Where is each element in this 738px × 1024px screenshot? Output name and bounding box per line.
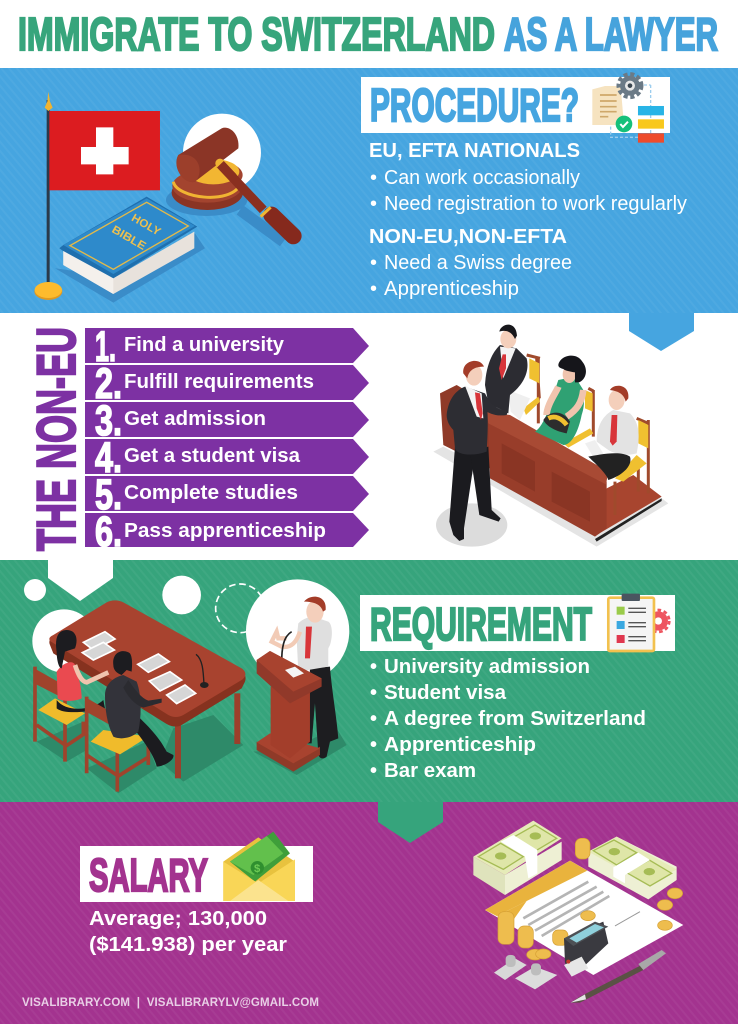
illustration: holy bible: BIBLE	[109, 224, 148, 253]
icon: envelope with money	[223, 832, 295, 901]
step 6	[85, 508, 369, 556]
list: requirements: Student visa	[384, 682, 507, 704]
arrow: blue pointer	[629, 313, 694, 351]
illustration: holy bible: HOLY	[129, 212, 163, 239]
list: requirements: A degree from Switzerland	[384, 708, 646, 730]
illustration: courtroom bench	[433, 325, 668, 547]
stamp	[564, 922, 608, 977]
step 4: Get a student visa	[124, 445, 301, 467]
list: requirements: •	[370, 656, 377, 678]
pen	[571, 950, 666, 1003]
step 4	[85, 434, 369, 482]
heading: the non-EU: THE NON-EU	[25, 327, 87, 551]
list: requirements: •	[370, 682, 377, 704]
list: requirements: Apprenticeship	[384, 734, 536, 756]
list: requirements: •	[370, 734, 377, 756]
cash stack left	[473, 821, 562, 895]
step 3: 3.	[95, 397, 122, 445]
step 5: 5.	[95, 471, 122, 519]
step 5	[85, 471, 369, 519]
step 1: Find a university	[124, 334, 285, 356]
icon: envelope with money: $	[254, 863, 261, 875]
text: non-EU, non-EFTA: Need a Swiss degree	[384, 252, 572, 274]
icon: procedure flowchart	[592, 74, 664, 143]
heading: requirement: REQUIREMENT	[370, 598, 592, 650]
text: EU, EFTA nationals	[369, 140, 687, 215]
icon: checklist with gear	[608, 594, 669, 651]
heading: procedure: PROCEDURE?	[370, 79, 579, 131]
text: EU, EFTA nationals: Need registration to work regularly	[384, 193, 687, 215]
list: requirements: •	[370, 760, 377, 782]
step 2	[85, 360, 369, 408]
title: IMMIGRATE TO SWITZERLAND	[18, 8, 495, 60]
list: requirements	[370, 656, 646, 782]
arrow: white pointer	[48, 560, 113, 601]
text: average salary: ($141.938) per year	[89, 934, 287, 956]
heading: salary: SALARY	[89, 849, 208, 901]
cash stack right	[588, 837, 677, 899]
coins	[498, 838, 683, 960]
text: EU, EFTA nationals: •	[370, 193, 377, 215]
illustration: swiss flag	[34, 92, 160, 300]
step 3	[85, 397, 369, 445]
step 6: 6.	[95, 508, 122, 556]
list: requirements: •	[370, 708, 377, 730]
illustration: decorative circles	[24, 576, 349, 683]
step 5: Complete studies	[124, 482, 298, 504]
illustration: holy bible	[55, 197, 205, 303]
illustration: gavel	[166, 114, 293, 242]
panel: salary	[0, 802, 738, 1024]
text: EU, EFTA nationals: Can work occasionally	[384, 167, 580, 189]
panel: requirement	[0, 560, 738, 802]
text: non-EU, non-EFTA: •	[370, 252, 377, 274]
text: non-EU, non-EFTA: •	[370, 278, 377, 300]
illustration: speaker at podium	[253, 597, 347, 775]
step 2: 2.	[95, 360, 122, 408]
footer contact: VISALIBRARY.COM | VISALIBRARYLV@GMAIL.COM	[22, 997, 319, 1009]
text: average salary	[89, 908, 287, 956]
step 6: Pass apprenticeship	[124, 520, 326, 542]
step 3: Get admission	[124, 408, 266, 430]
list: requirements: University admission	[384, 656, 590, 678]
step 1	[85, 323, 369, 371]
step 4: 4.	[95, 434, 122, 482]
text: non-EU, non-EFTA: NON-EU,NON-EFTA	[369, 226, 567, 248]
text: EU, EFTA nationals: •	[370, 167, 377, 189]
woman and chair	[34, 630, 108, 762]
list: requirements: Bar exam	[384, 760, 476, 782]
arrow: green pointer	[378, 802, 443, 843]
text: non-EU, non-EFTA	[369, 226, 572, 300]
illustration: money and contract	[473, 821, 683, 1003]
step 1: 1.	[95, 323, 116, 371]
illustration: meeting table	[34, 600, 246, 793]
panel: procedure	[0, 68, 738, 313]
step 2: Fulfill requirements	[124, 371, 314, 393]
text: EU, EFTA nationals: EU, EFTA NATIONALS	[369, 140, 580, 162]
contract	[485, 861, 683, 975]
text: average salary: Average; 130,000	[89, 908, 267, 930]
text: non-EU, non-EFTA: Apprenticeship	[384, 278, 519, 300]
panel: the non-EU steps	[25, 323, 369, 556]
small stamps	[494, 955, 557, 989]
man and chair	[86, 651, 173, 792]
